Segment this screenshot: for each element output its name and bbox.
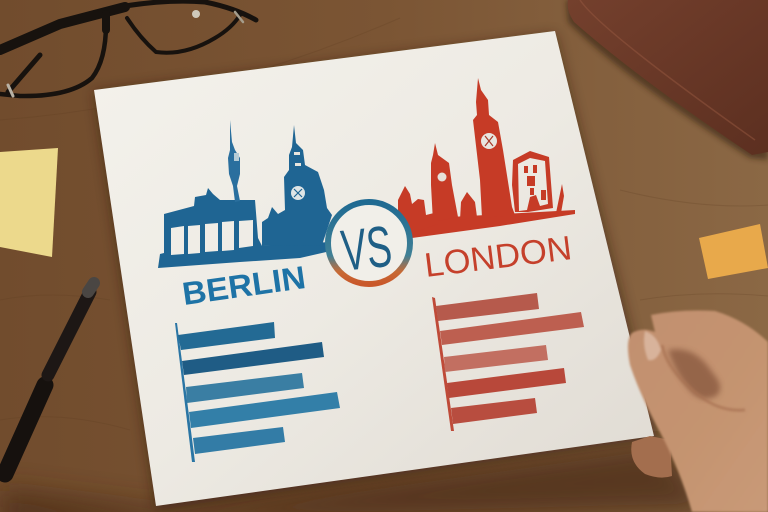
bar chart: London — [432, 293, 584, 431]
tower clock face — [291, 186, 305, 200]
small right spire — [556, 184, 564, 213]
bar chart: Berlin — [175, 322, 340, 462]
VS badge — [328, 202, 410, 284]
chart axis — [432, 297, 454, 431]
paper sheet — [94, 31, 654, 506]
palm and fingers — [628, 310, 768, 512]
lower finger — [631, 436, 672, 478]
bar 1 — [436, 293, 539, 321]
icon: gothic building — [512, 151, 553, 212]
chart axis — [175, 323, 195, 462]
base ground — [408, 210, 575, 238]
BERLIN label: BERLIN — [180, 259, 308, 312]
yellow sticky note — [0, 148, 58, 257]
bar 4 — [189, 392, 340, 428]
panel: Berlin skyline — [158, 120, 335, 268]
thumbnail — [644, 331, 661, 360]
paper shadow — [94, 34, 658, 510]
bar 2 — [182, 342, 324, 375]
icon: small spire — [460, 192, 477, 220]
icon: clock tower — [262, 125, 332, 246]
thumb shadow — [662, 345, 745, 410]
glasses — [0, 1, 256, 96]
icon: small left buildings — [398, 186, 438, 232]
hand — [628, 310, 768, 512]
finger gap shadow — [668, 349, 720, 399]
wallet — [566, 0, 768, 160]
bar 5 — [451, 398, 537, 424]
panel: London skyline — [398, 78, 575, 238]
Big Ben clock face — [481, 133, 497, 149]
bar 3 — [186, 373, 304, 403]
pen — [5, 283, 94, 474]
orange sticky note — [699, 224, 768, 279]
icon: TV tower — [228, 120, 240, 202]
icon: Big Ben — [473, 78, 515, 218]
VS text: VS — [338, 214, 395, 284]
bar 4 — [447, 368, 566, 398]
icon: second clock tower — [431, 143, 458, 222]
bar 5 — [193, 427, 285, 454]
bar 3 — [444, 345, 548, 372]
LONDON label: LONDON — [422, 229, 574, 285]
bar 1 — [178, 322, 275, 350]
bar 2 — [440, 312, 584, 345]
icon: Brandenburg Gate — [158, 188, 335, 268]
